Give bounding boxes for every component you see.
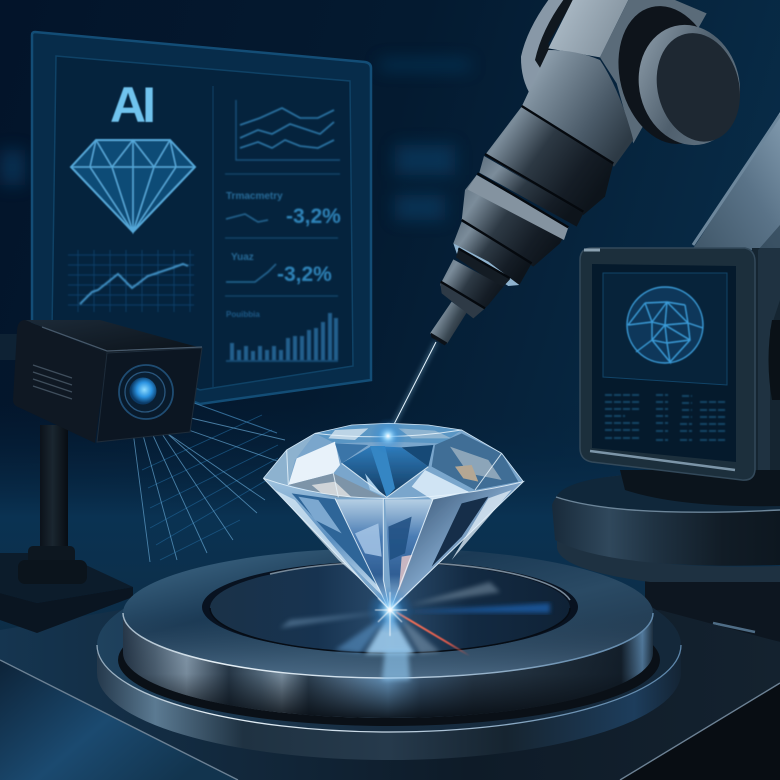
- black bands: [441, 106, 613, 308]
- line chart with grid: [68, 250, 194, 312]
- right monitor: [580, 248, 755, 480]
- robot arm with nozzle: [430, 0, 753, 345]
- pavilion centre: [335, 499, 388, 607]
- turntable: [97, 548, 681, 760]
- metric row: yield: -3,2%: [277, 263, 332, 286]
- top block: [548, 0, 628, 57]
- holographic AI analysis panel: [32, 32, 371, 404]
- slot on right platform: [713, 623, 755, 632]
- crown top band: [315, 423, 462, 443]
- elbow housing: [522, 50, 633, 167]
- icon: wireframe diamond: [71, 140, 195, 232]
- pavilion left: [263, 478, 387, 600]
- scan rays from camera: [132, 395, 285, 562]
- icon: wireframe sphere: [627, 287, 703, 363]
- data table on monitor: [605, 395, 726, 440]
- light pool on plate: [365, 612, 415, 654]
- grid display frame: [603, 273, 727, 385]
- camera: [13, 320, 202, 443]
- camera vents: [33, 365, 72, 399]
- camera lens: [119, 365, 173, 419]
- main disc side: [123, 613, 653, 718]
- metric row: yield: Yuaz: [231, 252, 254, 263]
- panel column divider: [212, 86, 214, 388]
- metric row: yield: [225, 238, 338, 296]
- sparkle: top of diamond: [370, 418, 406, 454]
- camera stand: [0, 334, 133, 633]
- bar chart: [226, 310, 338, 362]
- heading: AI: AI: [110, 77, 156, 133]
- table surface: [0, 610, 780, 780]
- bar chart: Pouibbia: [226, 310, 260, 319]
- metric row: accuracy: [225, 174, 341, 228]
- right machine: arm and base: [552, 112, 780, 642]
- end cap: [604, 0, 753, 156]
- recessed plate: [202, 561, 578, 653]
- metric row: accuracy: -3,2%: [286, 205, 341, 228]
- sparkle: tip of diamond: [366, 586, 414, 636]
- red reflection: [396, 612, 470, 656]
- metric row: accuracy: Trmacmetry: [226, 191, 283, 202]
- facet edges: [263, 430, 523, 610]
- rear bracket: [521, 0, 572, 97]
- multi-line trend chart: [236, 100, 340, 160]
- bottom plate: [97, 645, 681, 760]
- barrel segments: [485, 107, 613, 215]
- pavilion right: [392, 482, 522, 610]
- brilliant diamond: [263, 423, 523, 610]
- crown left: [263, 433, 315, 485]
- main disc top: [123, 548, 653, 678]
- laser beam: [388, 342, 436, 436]
- crown centre: [342, 446, 428, 497]
- needle holder: [430, 302, 467, 343]
- base disc: [552, 470, 780, 642]
- crown right: [432, 433, 518, 490]
